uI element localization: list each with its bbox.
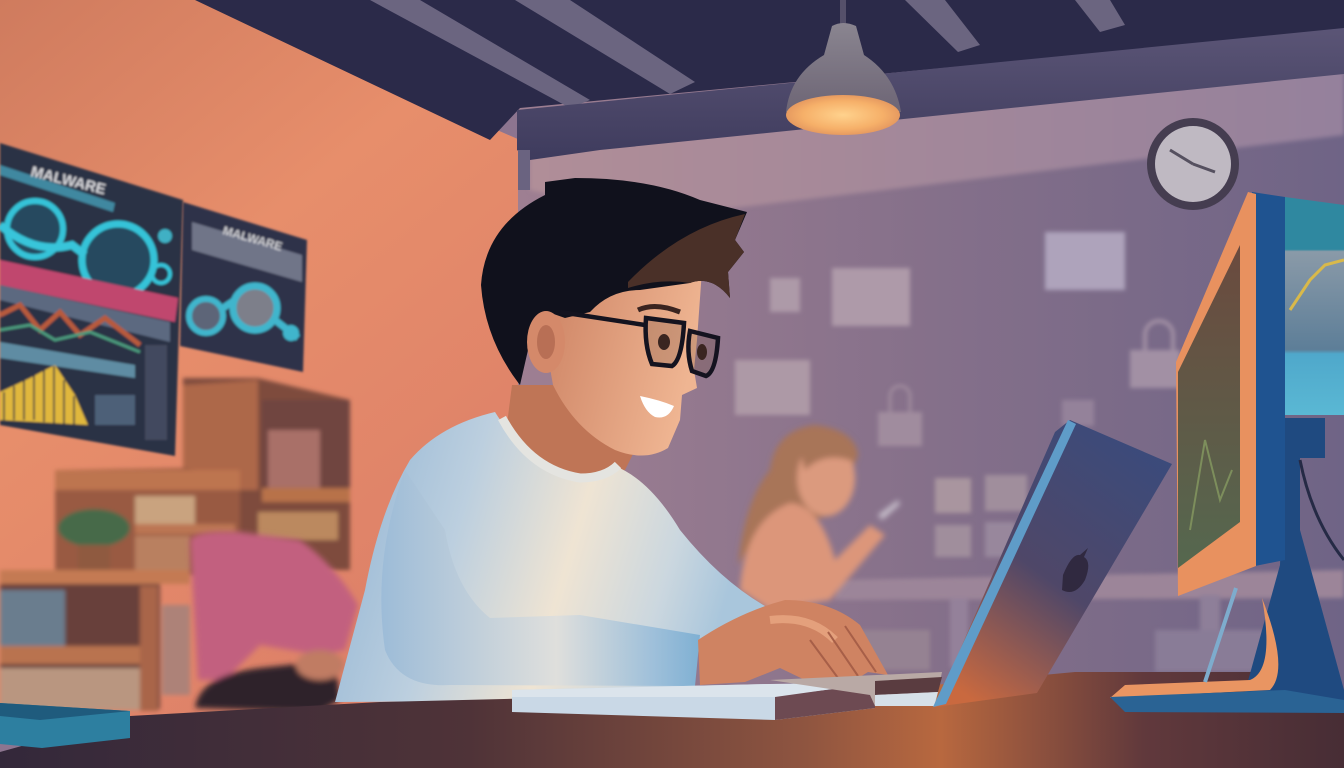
notebook [512,683,875,720]
hand on keyboard [698,600,888,685]
blue book on table left [0,703,130,748]
wall poster: left dashboard: MALWARE [29,163,108,198]
ceiling [195,0,1344,190]
blurred seated person in pink [190,532,358,712]
pendant lamp [786,0,901,135]
monitor back blue [1252,192,1285,566]
wall clock [1147,118,1239,210]
table [0,672,1344,768]
monitor screen [1178,245,1240,568]
monitor stand [1240,418,1344,710]
hair [481,178,747,385]
hair fringe highlight [628,214,745,298]
bookshelves [0,378,350,711]
face [545,270,702,456]
sleeve [381,470,700,686]
sweater body [335,412,765,702]
wall poster: right dashboard: MALWARE [221,223,284,254]
glasses [560,312,718,376]
ear [527,311,565,373]
eyebrow [638,306,680,312]
wall poster: left dashboard [0,143,183,456]
mouth [640,396,674,418]
second monitor [1285,197,1344,415]
wall poster: right dashboard [180,202,307,372]
desktop monitors [1110,192,1344,713]
monitor bezel [1176,192,1256,596]
blurred wall notes [735,232,1344,672]
neck [505,385,640,482]
eyes [658,334,670,350]
main character [335,178,888,702]
laptop [770,420,1172,707]
right purple wall [518,60,1344,710]
sweater collar [502,418,618,478]
blurred woman in background [738,425,900,610]
left orange wall [0,0,520,720]
